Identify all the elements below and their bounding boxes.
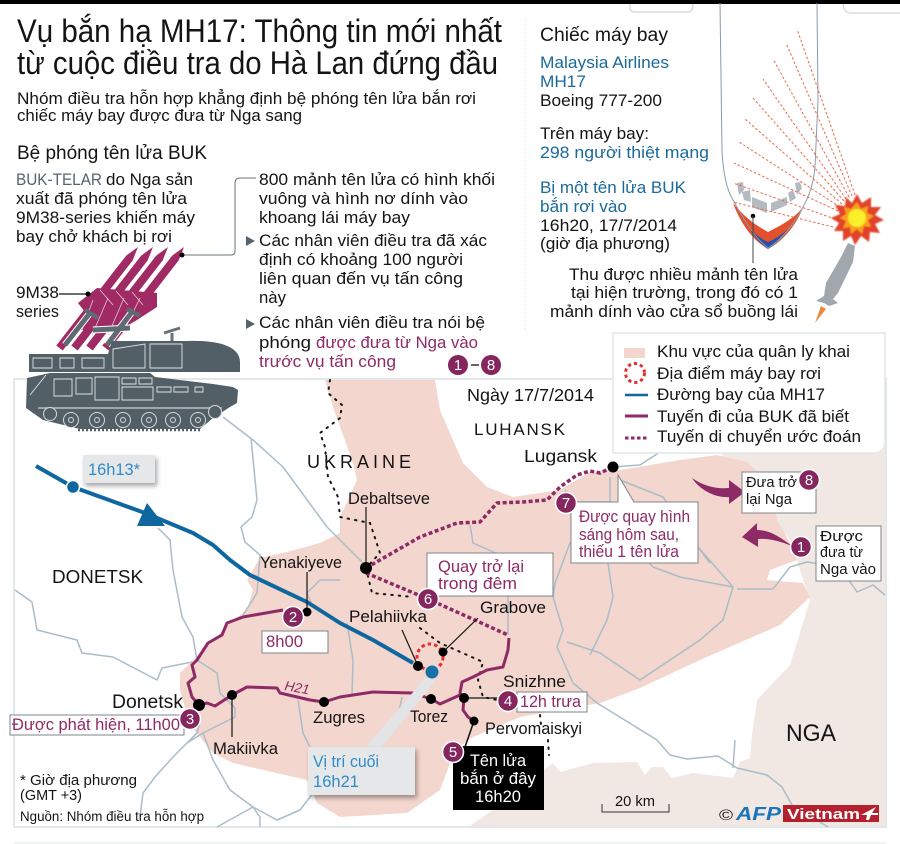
caption: fragments collected: tại hiện trường, trong đó có 1 <box>571 283 798 302</box>
callout: last position: 16h21 <box>313 772 359 791</box>
hull <box>26 373 238 429</box>
callout: spotted at 11h00: Được phát hiện, 11h00 <box>12 715 180 734</box>
text: BUK-TELAR description: xuất đã phóng tên lửa <box>16 189 188 208</box>
bottom rule <box>14 842 886 844</box>
text: 800 fragments: khoang lái máy bay <box>259 208 411 227</box>
text: BUK-TELAR description: do Nga sản <box>106 170 193 189</box>
region: Russia <box>470 448 885 826</box>
place names: Snizhne <box>503 672 566 691</box>
text: 800 fragments: 800 mảnh tên lửa có hình khối <box>259 170 495 189</box>
swatch: known route <box>625 414 648 418</box>
callout: 16h13 <box>83 455 155 483</box>
text: launcher from Russia: được đưa từ Nga vào <box>316 333 478 352</box>
callout: brought from Russia: Được <box>820 528 864 545</box>
callout: 8h00: 8h00 <box>266 632 303 651</box>
caption: fragments collected <box>550 265 799 321</box>
callout: filmed next morning: thiếu 1 tên lửa <box>579 542 679 561</box>
label: 9M38 series: 9M38 <box>16 283 59 302</box>
top black bar <box>0 0 900 13</box>
text: BUK-TELAR description: 9M38-series khiến máy <box>16 208 195 227</box>
callout: missile fired here: 16h20 <box>475 787 521 806</box>
legend <box>613 333 885 453</box>
credit: AFP Vietnam: AFP <box>735 804 782 824</box>
place names: Lugansk <box>524 446 597 466</box>
flight path MH17 <box>36 466 413 663</box>
callout: brought from Russia <box>816 526 881 581</box>
text: 100 people identified: này <box>259 288 286 307</box>
callout: missile fired here: Tên lửa <box>470 751 527 770</box>
place names: Donetsk <box>112 692 184 713</box>
date label: Ngày 17/7/2014 <box>467 385 594 405</box>
known BUK route <box>188 610 509 721</box>
callout: filmed next morning <box>571 475 698 563</box>
leader line from missile to text <box>180 178 256 258</box>
callout: noon: 12h trưa <box>520 692 582 711</box>
callout: filmed next morning: Được quay hình <box>579 507 690 526</box>
text: 100 people identified: định có khoảng 100 người <box>259 250 463 269</box>
title: Vụ bắn hạ MH17: Thông tin mới nhất <box>17 12 502 49</box>
rivers and borders <box>15 417 885 827</box>
legend: Tuyến di chuyển ước đoán <box>657 427 861 446</box>
callout: 8h00 <box>262 631 328 653</box>
place names: Debaltseve <box>348 489 430 508</box>
text: launcher from Russia: trước vụ tấn công <box>259 352 396 371</box>
panel: aircraft facts: MH17 <box>540 72 586 91</box>
text: launcher from Russia <box>246 313 485 371</box>
panel: aircraft facts: Malaysia Airlines <box>540 53 669 72</box>
text: 800 fragments <box>259 170 495 227</box>
credit: AFP Vietnam: Vietnam <box>787 806 860 823</box>
heading: BUK launcher: Bệ phóng tên lửa BUK <box>17 143 207 164</box>
numbered route markers: 2 <box>289 609 297 626</box>
place names: Makiivka <box>213 739 279 758</box>
icon: aircraft nose and missile blast <box>720 3 884 323</box>
region: separatist-held area <box>180 380 810 817</box>
callout: last position <box>308 747 415 795</box>
crash site marker <box>417 644 443 678</box>
cockpit windows <box>737 182 802 213</box>
numbered route markers: 7 <box>562 495 570 512</box>
subtitle <box>17 89 476 125</box>
place names: Grabove <box>480 598 546 617</box>
route marker range 1-8: 1 <box>454 357 462 374</box>
numbered route markers: 3 <box>186 711 194 728</box>
legend: Địa điểm máy bay rơi <box>657 364 821 383</box>
place names: UKRAINE <box>307 452 411 472</box>
text: BUK-TELAR description: bay chở khách bị rơi <box>16 227 172 246</box>
time dot <box>66 480 80 494</box>
subtitle: chiếc máy bay được đưa từ Nga sang <box>17 106 302 125</box>
panel: aircraft facts <box>540 25 709 253</box>
fuselage outline <box>720 3 818 248</box>
nose paint: red <box>733 203 803 249</box>
launcher rails <box>65 309 140 345</box>
text: launcher from Russia: Các nhân viên điều tra nói bệ <box>259 313 485 332</box>
text: 100 people identified <box>246 231 488 307</box>
numbered route markers: 1 <box>797 539 805 556</box>
callout: returned overnight <box>427 553 553 596</box>
label: 9M38 series: series <box>16 302 59 321</box>
window fragment leader <box>751 214 755 263</box>
credit: AFP Vietnam <box>719 804 879 824</box>
numbered route markers: 6 <box>424 591 432 608</box>
callout: back to Russia <box>742 472 816 513</box>
label: 9M38 series <box>16 283 90 321</box>
callout: brought from Russia: đưa từ <box>820 544 863 561</box>
place names: DONETSK <box>52 567 143 587</box>
text: 100 people identified: liên quan đến vụ tấn công <box>259 269 463 288</box>
track teeth <box>78 429 200 431</box>
icon: BUK launcher vehicle <box>26 247 240 430</box>
callout: returned overnight: trong đêm <box>438 574 517 593</box>
place names: Yenakiyeve <box>260 553 342 572</box>
place names: Pervomaiskyi <box>485 719 582 738</box>
panel: aircraft facts: Bị một tên lửa BUK <box>540 178 687 197</box>
nose paint: blue <box>749 227 790 249</box>
callout: missile fired here <box>453 746 544 810</box>
panel: aircraft facts: 298 người thiệt mạng <box>540 143 709 162</box>
callout: back to Russia: Đưa trở <box>746 474 797 491</box>
city dots and leaders <box>193 462 618 747</box>
legend: Tuyến đi của BUK đã biết <box>657 407 849 426</box>
place names: Pelahiivka <box>349 607 428 626</box>
arrow: brought from Russia <box>742 523 792 547</box>
text: 100 people identified: Các nhân viên điều tra đã xác <box>259 231 488 250</box>
explosion <box>831 194 884 245</box>
swatch: crash site <box>626 364 644 382</box>
numbered route markers: 4 <box>504 693 512 710</box>
credit: AFP Vietnam: © <box>719 807 733 824</box>
map frame <box>14 379 886 827</box>
panel: aircraft facts: Boeing 777-200 <box>540 91 662 110</box>
fragment trajectories <box>733 29 855 227</box>
callout: missile fired here: bắn ở đây <box>460 769 536 788</box>
swatch: separatist area <box>624 348 645 358</box>
panel: aircraft facts: bắn rơi vào <box>540 197 627 216</box>
swatch: flight path <box>625 394 648 396</box>
route marker range 1-8 <box>448 355 501 375</box>
scale bar <box>602 794 669 812</box>
scale bar: 20 km <box>615 794 655 810</box>
callout: filmed next morning: sáng hôm sau, <box>579 525 679 544</box>
numbered route markers: 5 <box>449 744 457 761</box>
suspected route: black dotted <box>320 380 549 755</box>
footnote: local time: (GMT +3) <box>20 788 82 804</box>
swatch: estimated route <box>625 436 648 440</box>
text: BUK-TELAR description <box>16 170 195 246</box>
callout: last position: Vị trí cuối <box>313 752 379 771</box>
caption: fragments collected: Thu được nhiều mảnh tên lửa <box>569 265 799 284</box>
missile <box>815 243 855 323</box>
place names: Torez <box>410 707 448 726</box>
callout: brought from Russia: Nga vào <box>820 561 876 578</box>
footnote: local time: * Giờ địa phương <box>20 773 137 789</box>
numbered route markers: 8 <box>805 472 813 489</box>
source: Nguồn: Nhóm điều tra hỗn hợp <box>20 809 204 824</box>
route marker range 1-8: 8 <box>487 357 495 374</box>
legend: Đường bay của MH17 <box>657 385 825 404</box>
footnote: local time <box>20 773 137 804</box>
radar post <box>164 328 180 342</box>
text: 800 fragments: vuông và hình nơ dính vào <box>259 189 468 208</box>
legend: Khu vực của quân ly khai <box>657 342 850 361</box>
title: từ cuộc điều tra do Hà Lan đứng đầu <box>17 45 498 81</box>
heading: aircraft: Chiếc máy bay <box>540 25 668 46</box>
estimated BUK route <box>366 467 613 635</box>
pointer: last position <box>366 677 436 747</box>
title <box>17 12 502 81</box>
place names: NGA <box>786 720 836 747</box>
arrow: returned to Russia <box>692 478 745 504</box>
callout: returned overnight: Quay trở lại <box>438 557 524 576</box>
place names: Zugres <box>313 708 365 727</box>
text: launcher from Russia: phóng <box>259 333 311 352</box>
callout: 16h13: 16h13* <box>88 460 140 479</box>
numbered route markers <box>180 470 820 762</box>
divider: column dotted line <box>524 20 526 330</box>
map <box>14 379 886 827</box>
wheels <box>44 406 222 428</box>
upper body <box>29 341 240 372</box>
text: BUK-TELAR description: BUK-TELAR <box>16 170 102 189</box>
panel: aircraft facts: (giờ địa phương) <box>540 234 670 253</box>
missiles <box>56 247 184 350</box>
place names <box>52 420 836 758</box>
arrowhead <box>137 503 165 526</box>
place names: LUHANSK <box>474 420 566 439</box>
callout: back to Russia: lại Nga <box>746 491 793 508</box>
panel: aircraft facts: 16h20, 17/7/2014 <box>540 216 677 235</box>
road label H21: H21 <box>283 678 311 697</box>
panel: aircraft facts: Trên máy bay: <box>540 124 649 143</box>
subtitle: Nhóm điều tra hỗn hợp khẳng định bệ phóng tên lửa bắn rơi <box>17 89 476 108</box>
caption: fragments collected: mảnh dính vào cửa sổ buồng lái <box>550 302 798 321</box>
